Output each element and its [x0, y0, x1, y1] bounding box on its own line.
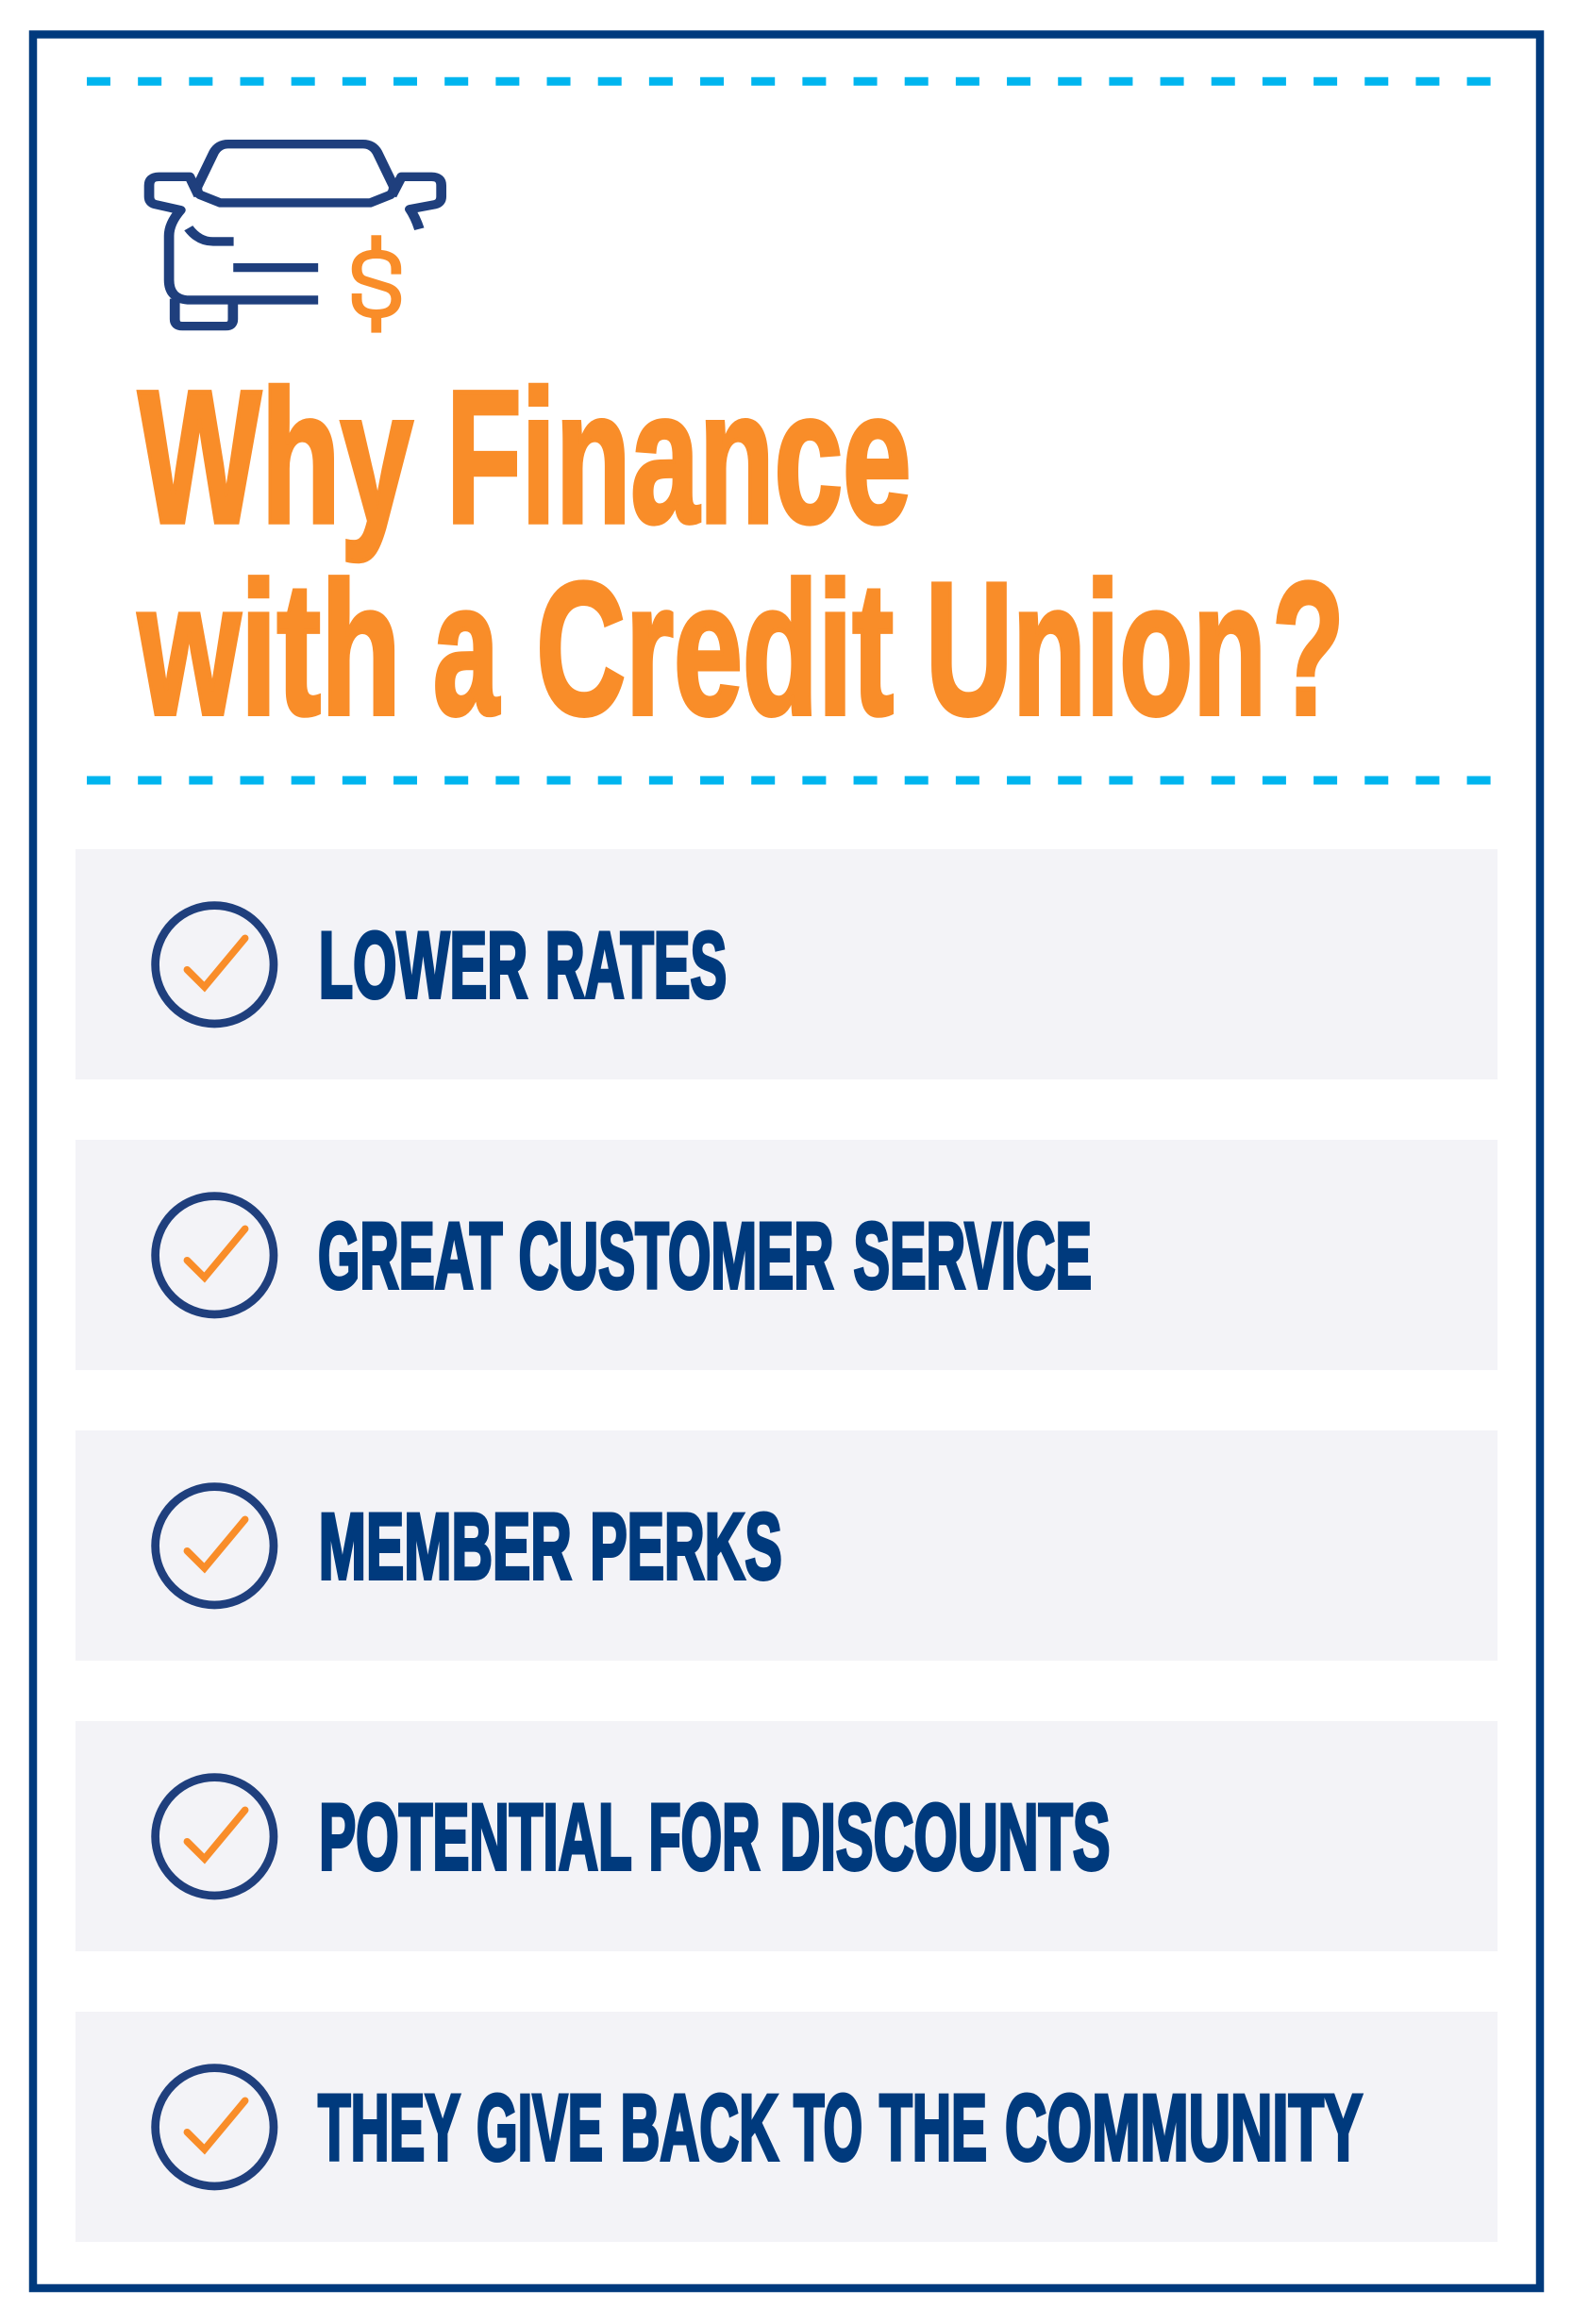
label: lower rates: RATES: [545, 912, 727, 1017]
label: potential for discounts: FOR: [649, 1784, 761, 1889]
label: potential for discounts: [319, 1784, 1111, 1889]
title: Credit: [536, 543, 894, 755]
title: Finance: [446, 352, 912, 562]
label: they give back to the community: THE: [879, 2075, 987, 2180]
label: they give back to the community: GIVE: [477, 2075, 603, 2180]
icon: check circle: [156, 906, 274, 1024]
panel: potential for discounts: [75, 1721, 1498, 1951]
panel: great customer service: [75, 1140, 1498, 1370]
dollar sign: [357, 235, 396, 333]
label: they give back to the community: [318, 2075, 1363, 2180]
label: great customer service: CUSTOMER: [519, 1203, 834, 1308]
label: member perks: MEMBER: [319, 1494, 572, 1598]
label: great customer service: SERVICE: [853, 1203, 1092, 1308]
title: [138, 352, 1345, 755]
title: Why: [138, 352, 413, 562]
label: great customer service: GREAT: [318, 1203, 502, 1308]
title: Union: [926, 543, 1266, 755]
icon: check circle: [156, 1196, 274, 1314]
title: a: [433, 543, 500, 755]
label: great customer service: [318, 1203, 1092, 1308]
label: lower rates: LOWER: [319, 912, 527, 1017]
label: potential for discounts: DISCOUNTS: [779, 1784, 1110, 1889]
label: they give back to the community: COMMUNITY: [1005, 2075, 1363, 2180]
title: ?: [1272, 543, 1345, 755]
top dashed divider: [87, 77, 1491, 86]
icon: check circle: [156, 1778, 274, 1896]
title: with: [138, 543, 401, 755]
car outline: [149, 144, 442, 326]
bottom dashed divider: [87, 776, 1491, 785]
panel: member perks: [75, 1430, 1498, 1661]
panel: they give back to the community: [75, 2012, 1498, 2242]
panel: lower rates: [75, 849, 1498, 1079]
label: potential for discounts: POTENTIAL: [319, 1784, 632, 1889]
icon: car with dollar sign: [149, 144, 442, 333]
label: they give back to the community: BACK: [621, 2075, 778, 2180]
label: they give back to the community: TO: [794, 2075, 862, 2180]
icon: check circle: [156, 2068, 274, 2186]
icon: check circle: [156, 1487, 274, 1605]
label: member perks: PERKS: [590, 1494, 782, 1598]
label: they give back to the community: THEY: [318, 2075, 460, 2180]
